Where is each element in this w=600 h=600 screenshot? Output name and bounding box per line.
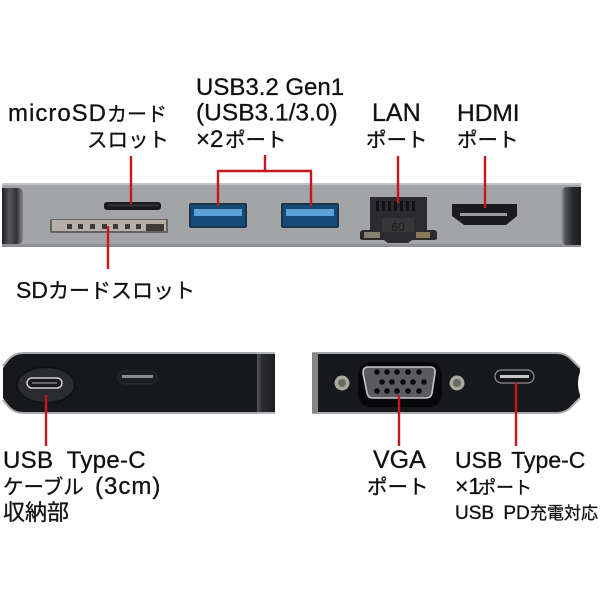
label: microSD card slot: スロット xyxy=(87,129,169,152)
label: microSD card slot: microSD xyxy=(8,100,107,127)
stored USB-C cable plug xyxy=(27,378,62,388)
label: USB Type-C x1 port, USB PD charging: 充電対応 xyxy=(530,504,598,523)
label: LAN port: ポート xyxy=(366,129,428,152)
recessed cable storage xyxy=(17,367,75,403)
LAN port: 60 xyxy=(391,220,405,234)
label: VGA port: ポート xyxy=(367,476,428,499)
VGA port xyxy=(358,362,442,407)
microSD slot xyxy=(104,202,161,210)
label: SD card slot: カードスロット xyxy=(48,280,195,303)
screw right xyxy=(450,376,464,390)
label: USB3.2 Gen1 x2 ports: ポート xyxy=(225,129,286,152)
LAN port xyxy=(360,197,437,243)
label: SD card slot: SD xyxy=(16,277,48,303)
label: USB Type-C cable storage: 収納部 xyxy=(3,500,69,525)
HDMI port xyxy=(452,204,517,225)
label: LAN port: LAN xyxy=(372,99,421,127)
bottom-left device: end panel xyxy=(3,352,275,414)
label: USB Type-C x1 port, USB PD charging: ポート xyxy=(478,478,532,498)
SD card slot xyxy=(50,219,168,233)
left grip xyxy=(2,188,23,244)
USB-A port 1 xyxy=(189,203,247,228)
label: USB Type-C x1 port, USB PD charging: USB PD xyxy=(455,503,530,524)
red leader lines xyxy=(46,155,516,446)
USB-A port 2 xyxy=(281,203,339,228)
label: USB3.2 Gen1 x2 ports: USB3.2 Gen1 xyxy=(196,74,344,101)
label: USB3.2 Gen1 x2 ports: (USB3.1/3.0) xyxy=(196,100,338,126)
label: HDMI port: HDMI xyxy=(457,100,520,127)
screw left xyxy=(334,376,350,390)
label: USB Type-C cable storage: (3cm) xyxy=(95,473,161,500)
label: USB Type-C x1 port, USB PD charging: ×1 xyxy=(455,473,481,499)
label: USB Type-C x1 port, USB PD charging: USB Type-C xyxy=(455,447,585,473)
top device: side panel with ports xyxy=(2,183,581,247)
label: VGA port: VGA xyxy=(373,446,426,474)
label: USB Type-C cable storage: USB Type-C xyxy=(3,447,146,474)
right grip xyxy=(561,187,581,245)
label: USB3.2 Gen1 x2 ports: ×2 xyxy=(196,126,223,153)
bottom-right device: end panel xyxy=(312,353,580,413)
label: USB Type-C cable storage: ケーブル xyxy=(3,475,84,499)
label: HDMI port: ポート xyxy=(457,129,518,152)
USB-C port xyxy=(495,370,534,383)
label: microSD card slot: カード xyxy=(107,104,167,126)
USB-C port xyxy=(118,371,157,384)
